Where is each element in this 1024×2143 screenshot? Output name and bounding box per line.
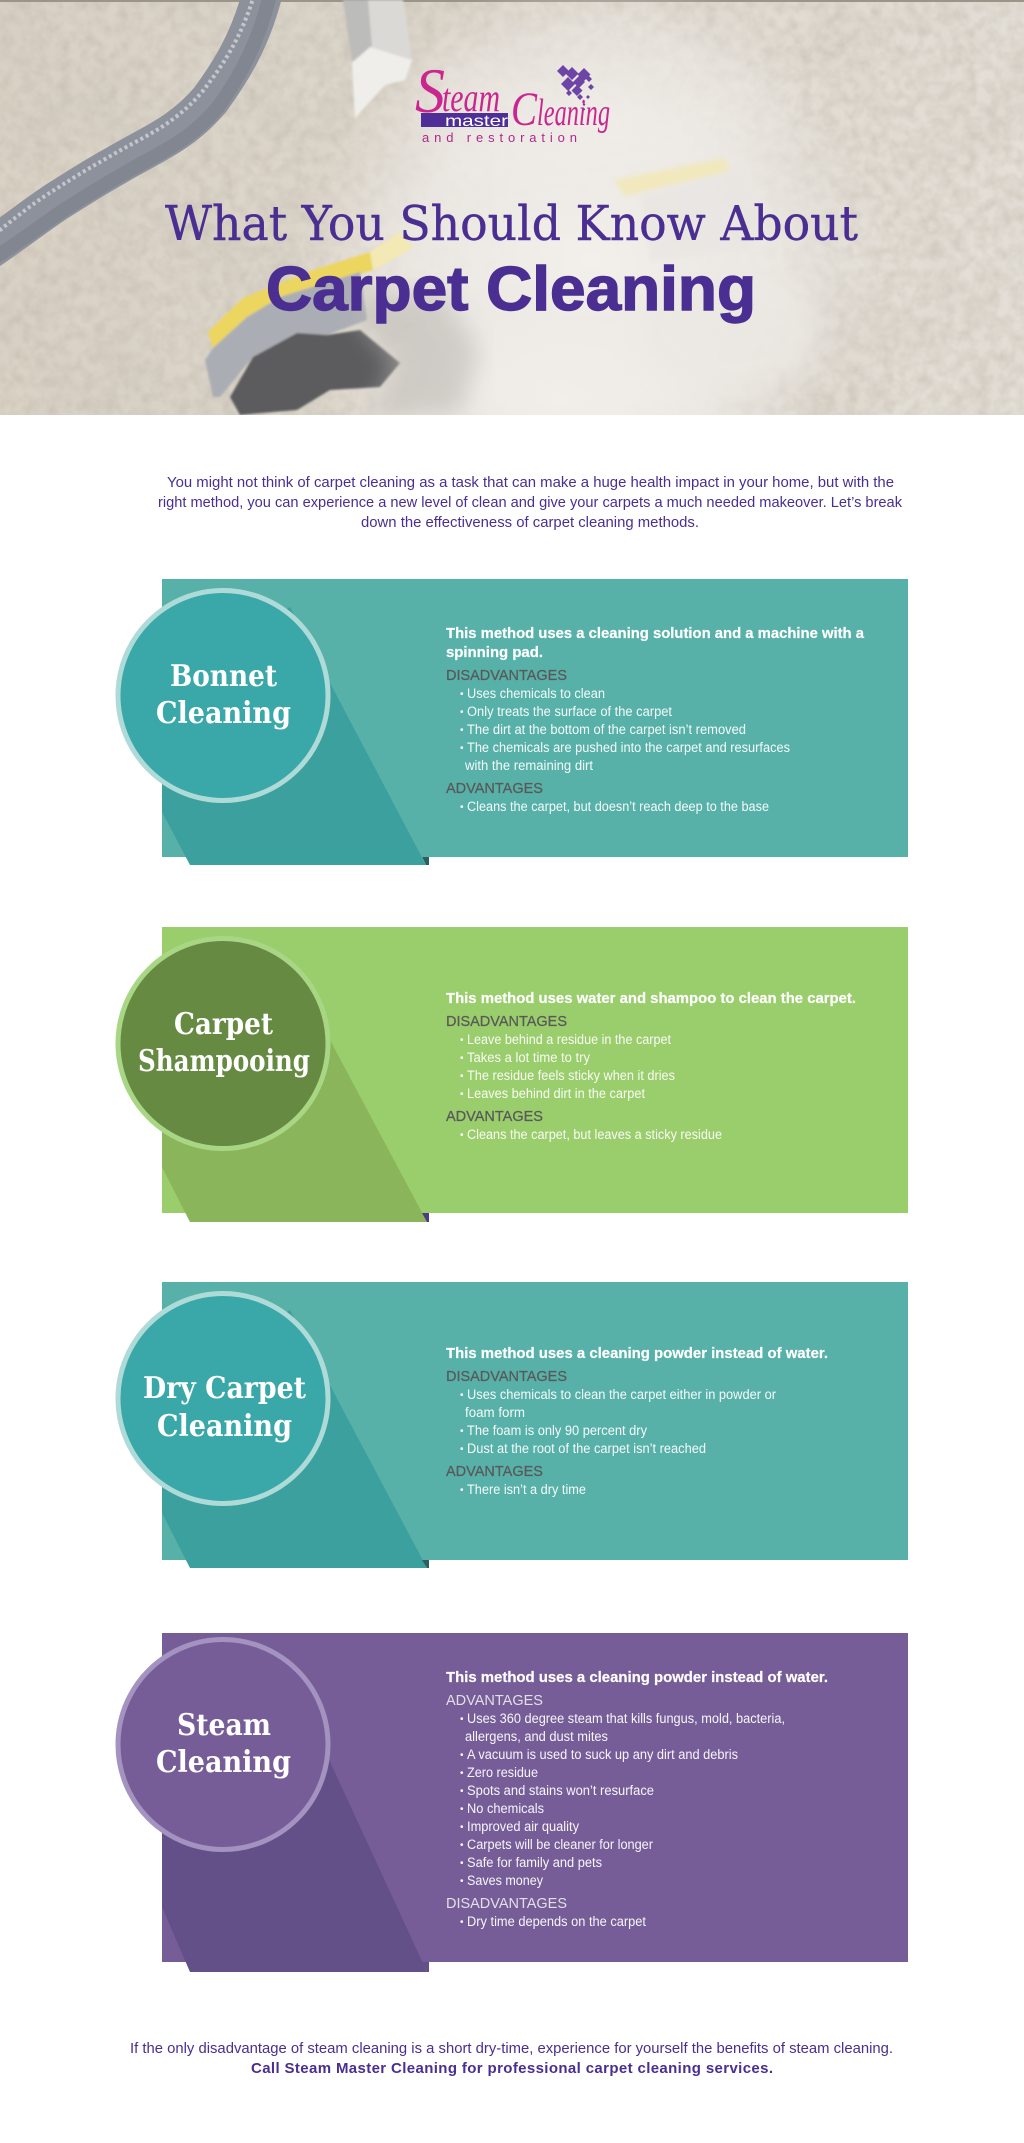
circle	[118, 590, 328, 800]
circle title: Shampooing	[138, 1044, 310, 1079]
method details: allergens, and dust mites	[465, 1729, 608, 1744]
method details: This method uses water and shampoo to clean the carpet.	[446, 990, 856, 1007]
method details: •	[460, 1390, 464, 1401]
method details: Takes a lot time to try	[467, 1050, 590, 1065]
method details: •	[460, 1840, 464, 1851]
method details: No chemicals	[467, 1801, 544, 1816]
method details: •	[460, 1876, 464, 1887]
circle title: Carpet	[174, 1007, 273, 1042]
method details: Dust at the root of the carpet isn’t reached	[467, 1441, 706, 1456]
method details: •	[460, 1822, 464, 1833]
method details: with the remaining dirt	[464, 758, 593, 773]
ribbon shadow	[162, 1675, 427, 1972]
intro text: down the effectiveness of carpet cleaning methods.	[361, 514, 699, 531]
logo: Steam Master Cleaning and Restoration: master	[445, 113, 509, 130]
method details: Uses 360 degree steam that kills fungus, mold, bacteria,	[467, 1711, 785, 1726]
circle title	[143, 1371, 306, 1444]
title	[165, 196, 858, 324]
method details: Uses chemicals to clean	[467, 686, 605, 701]
method details: Dry time depends on the carpet	[467, 1914, 646, 1929]
title: What You Should Know About	[165, 196, 858, 252]
footer call to action	[130, 2040, 893, 2077]
circle title: Dry Carpet	[143, 1371, 306, 1406]
method details: Leave behind a residue in the carpet	[467, 1032, 671, 1047]
method details: •	[460, 1768, 464, 1779]
method details: Saves money	[467, 1873, 543, 1888]
footer call to action: If the only disadvantage of steam cleaning is a short dry-time, experience for yourself the benefits of steam cleaning.	[130, 2040, 893, 2057]
method details: ADVANTAGES	[446, 1463, 543, 1480]
ribbon shadow	[162, 1310, 427, 1568]
method details: •	[460, 1858, 464, 1869]
method details: DISADVANTAGES	[446, 1368, 567, 1385]
method details: The foam is only 90 percent dry	[467, 1423, 647, 1438]
method details: Safe for family and pets	[467, 1855, 602, 1870]
intro text: You might not think of carpet cleaning as a task that can make a huge health impact in your home, but with the	[167, 474, 894, 491]
method details: Carpets will be cleaner for longer	[467, 1837, 653, 1852]
circle title: Bonnet	[170, 659, 277, 694]
method details: Cleans the carpet, but doesn’t reach deep to the base	[467, 799, 769, 814]
method details: •	[460, 725, 464, 736]
method details: •	[460, 1035, 464, 1046]
method details: ADVANTAGES	[446, 780, 543, 797]
method details: Leaves behind dirt in the carpet	[467, 1086, 645, 1101]
method details: •	[460, 1089, 464, 1100]
method details: DISADVANTAGES	[446, 1895, 567, 1912]
method details: This method uses a cleaning powder instead of water.	[446, 1345, 828, 1362]
panel: dry carpet cleaning	[118, 1282, 908, 1568]
method details	[446, 990, 856, 1142]
method details: •	[460, 1917, 464, 1928]
method details: •	[460, 1485, 464, 1496]
logo: Steam Master Cleaning and Restoration: and restoration	[422, 130, 577, 145]
ribbon shadow	[162, 607, 426, 865]
method details: DISADVANTAGES	[446, 1013, 567, 1030]
circle title: Cleaning	[156, 1745, 291, 1780]
method details: Uses chemicals to clean the carpet either in powder or	[467, 1387, 776, 1402]
circle title	[156, 1708, 291, 1780]
panel: carpet shampooing	[118, 927, 908, 1222]
circle	[118, 1640, 328, 1850]
footer call to action: Call Steam Master Cleaning for professional carpet cleaning services.	[251, 2060, 773, 2077]
method details: •	[460, 1804, 464, 1815]
method details: •	[460, 1714, 464, 1725]
method details: Cleans the carpet, but leaves a sticky residue	[467, 1127, 722, 1142]
method details: •	[460, 1426, 464, 1437]
method details: Only treats the surface of the carpet	[467, 704, 672, 719]
method details: •	[460, 802, 464, 813]
method details	[446, 625, 865, 814]
panel: bonnet cleaning	[118, 579, 908, 865]
method details: •	[460, 1786, 464, 1797]
intro text	[158, 474, 902, 531]
method details	[446, 1345, 828, 1497]
intro text: right method, you can experience a new level of clean and give your carpets a much needed makeover. Let’s break	[158, 494, 902, 511]
circle title	[138, 1007, 310, 1079]
method details: •	[460, 1750, 464, 1761]
logo: Steam Master Cleaning and Restoration: team	[442, 75, 500, 120]
method details	[446, 1669, 828, 1929]
method details: spinning pad.	[446, 644, 543, 661]
method details: •	[460, 707, 464, 718]
method details: •	[460, 1053, 464, 1064]
title: Carpet Cleaning	[266, 255, 756, 324]
circle	[118, 1294, 328, 1504]
method details: ADVANTAGES	[446, 1108, 543, 1125]
method details: There isn’t a dry time	[467, 1482, 586, 1497]
ribbon shadow	[162, 965, 427, 1222]
method details: Improved air quality	[467, 1819, 579, 1834]
method details: The chemicals are pushed into the carpet and resurfaces	[467, 740, 790, 755]
hero photo: carpet being steam cleaned	[0, 0, 1024, 415]
method details: foam form	[465, 1405, 525, 1420]
method details: The residue feels sticky when it dries	[467, 1068, 675, 1083]
method details: A vacuum is used to suck up any dirt and debris	[467, 1747, 738, 1762]
method details: Spots and stains won’t resurface	[467, 1783, 654, 1798]
logo: Steam Master Cleaning and Restoration	[415, 55, 610, 145]
method details: The dirt at the bottom of the carpet isn’t removed	[467, 722, 746, 737]
panel: steam cleaning	[118, 1633, 908, 1972]
method details: This method uses a cleaning powder instead of water.	[446, 1669, 828, 1686]
method details: •	[460, 1444, 464, 1455]
logo: Steam Master Cleaning and Restoration: S	[415, 55, 445, 126]
circle title: Cleaning	[157, 1409, 292, 1444]
method details: DISADVANTAGES	[446, 667, 567, 684]
circle	[118, 938, 328, 1148]
circle title: Steam	[177, 1708, 271, 1743]
method details: •	[460, 743, 464, 754]
method details: Zero residue	[467, 1765, 538, 1780]
method details: •	[460, 689, 464, 700]
method details: ADVANTAGES	[446, 1692, 543, 1709]
logo: Steam Master Cleaning and Restoration: C	[511, 83, 538, 136]
logo: Steam Master Cleaning and Restoration: leaning	[537, 92, 610, 134]
method details: •	[460, 1130, 464, 1141]
method details: This method uses a cleaning solution and a machine with a	[446, 625, 865, 642]
circle title: Cleaning	[156, 696, 291, 731]
method details: •	[460, 1071, 464, 1082]
circle title	[156, 659, 291, 731]
